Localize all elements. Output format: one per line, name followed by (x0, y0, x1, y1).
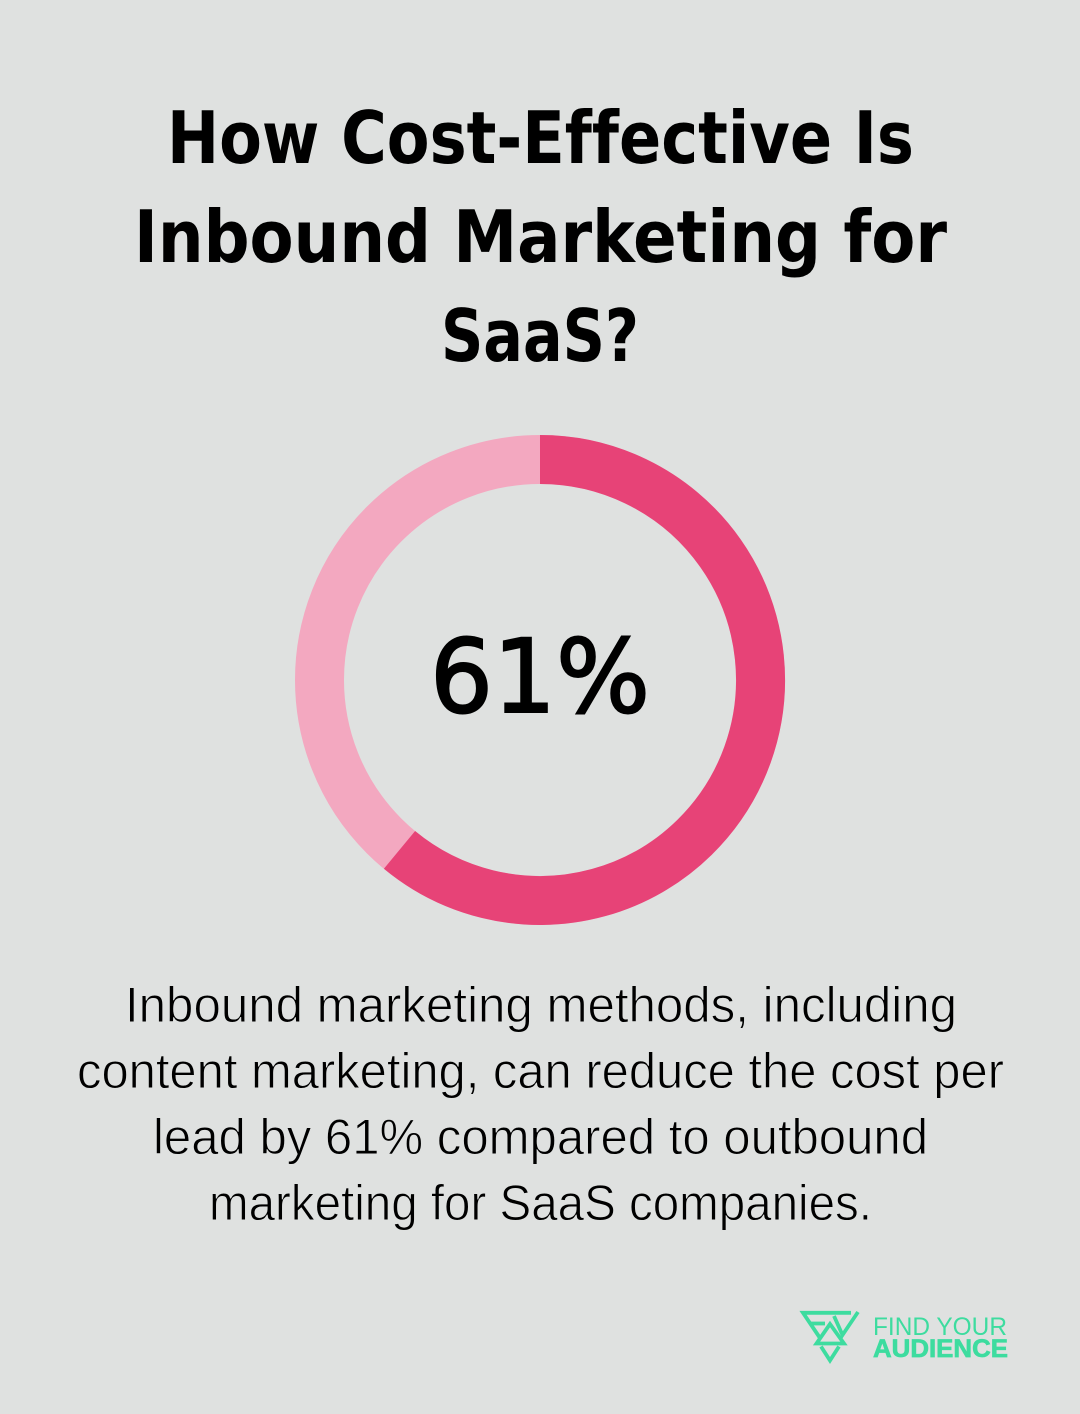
logo wordmark (873, 1313, 1008, 1363)
description text: Inbound marketing methods, including (125, 977, 957, 1033)
title: How Cost-Effective Is (167, 96, 914, 180)
title: Inbound Marketing for (134, 195, 947, 279)
description text: marketing for SaaS companies. (209, 1175, 872, 1231)
title (134, 96, 947, 378)
description text: lead by 61% compared to outbound (153, 1109, 928, 1165)
logo: Find Your Audience (803, 1312, 1008, 1363)
description text (77, 977, 1004, 1231)
donut value: 61% (430, 618, 650, 737)
description text: content marketing, can reduce the cost per (77, 1043, 1004, 1099)
title: SaaS? (441, 294, 639, 378)
donut chart: 61% (320, 460, 761, 900)
icon: logo triangles (803, 1312, 858, 1360)
logo wordmark: FIND YOUR (873, 1313, 1007, 1341)
logo wordmark: AUDIENCE (873, 1335, 1008, 1363)
